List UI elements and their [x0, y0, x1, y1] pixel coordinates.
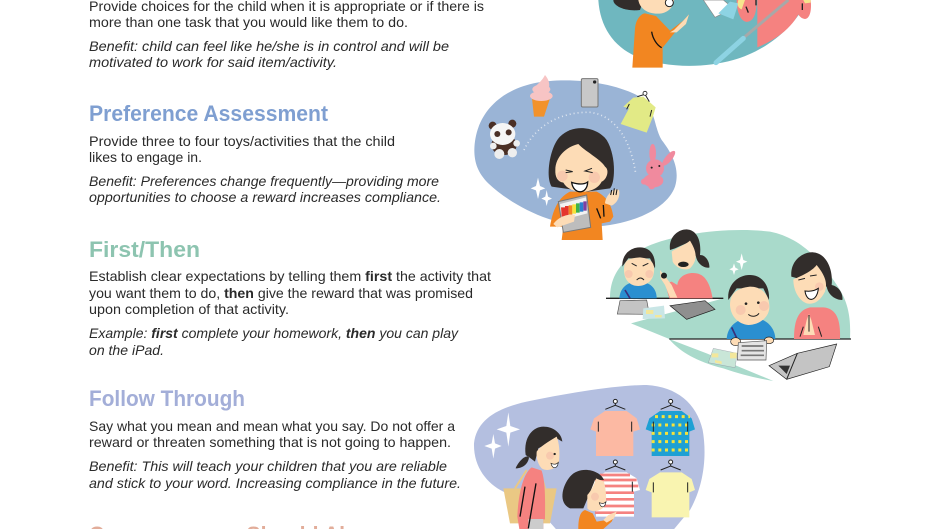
text: First/Then body [89, 268, 491, 358]
blob background [474, 80, 677, 227]
text: Preference Assessment body: Provide three to four toys/activities that the child [89, 133, 395, 149]
section: choices intro text: Benefit: child can feel like he/she is in control and will be [89, 38, 449, 54]
illustration: homework then reward [606, 229, 851, 381]
text: First/Then body: Establish clear expectations by telling them first the activity that [89, 268, 491, 284]
text: First/Then body: you want them to do, then give the reward that was promised [89, 285, 473, 301]
girl [549, 128, 619, 240]
text: First/Then body: on the iPad. [89, 342, 164, 358]
scolding mother [660, 229, 713, 298]
text: Follow Through body: Say what you mean and mean what you say. Do not offer a [89, 418, 455, 434]
blob background [474, 385, 705, 529]
yellow shirt [646, 460, 695, 517]
striped shirt [590, 460, 640, 517]
table lines [606, 298, 851, 339]
child [562, 470, 617, 529]
icon: panda [489, 120, 520, 159]
sparkles [729, 253, 747, 275]
text: First/Then body: upon completion of that activity. [89, 301, 289, 317]
happy boy [727, 275, 775, 346]
text: Follow Through body: and stick to your word. Increasing compliance in the future. [89, 475, 461, 491]
section: choices intro text: more than one task that you would like them to do. [89, 14, 408, 30]
section: choices intro text: motivated to work for said item/activity. [89, 54, 337, 70]
icon: ice cream [530, 75, 553, 117]
peach shirt [590, 399, 640, 456]
small workbook [617, 300, 649, 314]
text: Follow Through body [89, 418, 461, 491]
open workbook [737, 341, 767, 360]
blob background [610, 230, 850, 339]
blue dotted shirt [646, 399, 695, 456]
sparkles [531, 178, 552, 206]
dotted arc [524, 112, 636, 173]
text: Follow Through body: reward or threaten something that is not going to happen. [89, 434, 451, 450]
text: Preference Assessment body: opportunities to choose a reward increases compliance. [89, 189, 441, 205]
text: Preference Assessment body: Benefit: Preferences change frequently—providing more [89, 173, 439, 189]
icon: green shirt [621, 91, 656, 133]
bag [503, 488, 557, 523]
icon: pink bunny [641, 144, 677, 189]
heading: First/Then: First/Then [89, 237, 200, 262]
section: choices intro text [89, 0, 484, 70]
heading: Preference Assessment: Preference Assessment [89, 101, 329, 126]
text: Preference Assessment body [89, 133, 441, 205]
illustration: choosing between tasks [598, 0, 811, 68]
happy mother [791, 252, 843, 339]
illustration: girl with preferred items [474, 75, 677, 240]
closed tablet [670, 301, 715, 319]
illustration: shopping for shirts [474, 385, 705, 529]
icon: phone [581, 79, 598, 107]
heading: Follow Through: Follow Through [89, 386, 245, 411]
text: Follow Through body: Benefit: This will teach your children that you are reliable [89, 458, 447, 474]
text: Preference Assessment body: likes to engage in. [89, 149, 202, 165]
text: First/Then body: Example: first complete your homework, then you can play [89, 325, 459, 341]
sad boy [619, 247, 657, 298]
mother [516, 427, 562, 529]
sparkles [484, 412, 520, 459]
laptop [769, 344, 837, 379]
